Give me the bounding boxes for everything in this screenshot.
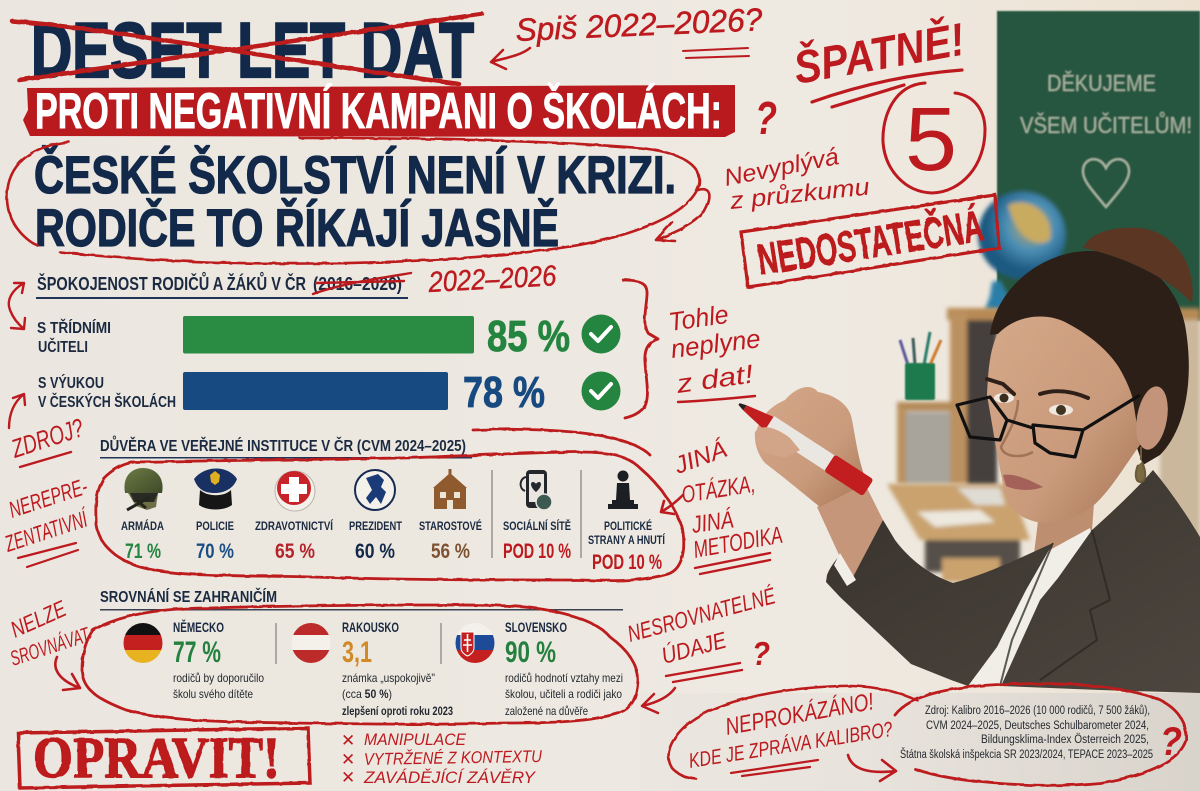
icon: phone [521, 470, 552, 510]
desk [887, 484, 1030, 582]
flag: Slovakia [456, 623, 494, 663]
column: mayors: STAROSTOVÉ [419, 518, 482, 533]
sources [900, 705, 1153, 761]
abroad loop [82, 605, 638, 724]
row: teaching: 78 % [463, 368, 545, 417]
title strike-through [12, 14, 482, 84]
Austria [342, 619, 453, 718]
note: Spiš 2022–2026? [491, 1, 763, 69]
row: teaching: V ČESKÝCH ŠKOLÁCH [38, 392, 176, 411]
correction strike [313, 273, 411, 294]
pencil cup [900, 332, 941, 400]
column: political parties: POD 10 % [592, 551, 662, 574]
Austria: RAKOUSKO [342, 619, 399, 635]
red banner: PROTI NEGATIVNÍ KAMPANI O ŠKOLÁCH: [35, 82, 722, 139]
bracket [623, 280, 658, 418]
correction: 2022–2026: 2022–2026 [427, 260, 558, 299]
brows [987, 379, 1088, 398]
icon: politician [608, 470, 638, 509]
stamp: nedostatečná: NEDOSTATEČNÁ [754, 200, 987, 285]
column: health care: 65 % [275, 540, 315, 563]
icon: police cap [194, 468, 237, 510]
note: nesrovnatelné údaje: ? [752, 635, 770, 672]
Germany [173, 618, 264, 701]
section 2: trust [100, 435, 666, 574]
note: neprokázáno, kde je zpráva Kalibro: NEPROKÁZÁNO! [723, 688, 876, 741]
ear [1132, 384, 1172, 452]
Germany: 77 % [173, 636, 221, 669]
flag: Germany [124, 623, 162, 663]
hair strands over forehead [992, 290, 1150, 405]
section heading: SROVNÁNÍ SE ZAHRANIČÍM [100, 587, 277, 606]
column: president: 60 % [355, 540, 395, 563]
note: jiná otázka, jiná metodika: OTÁZKA, [680, 471, 757, 509]
stamp: nedostatečná [741, 195, 999, 287]
note: tohle neplyne z dat: Tohle [667, 299, 730, 337]
title: Deset let dat: DESET LET DAT [31, 6, 474, 94]
chalkboard [997, 11, 1200, 321]
question mark at sources: ? [1160, 720, 1182, 764]
list of objections: ✕ [341, 768, 355, 787]
marker [734, 396, 874, 496]
chalkboard: DĚKUJEME [1047, 70, 1156, 96]
note: nesrovnatelné údaje [625, 582, 779, 713]
Austria: (cca 50 %) [342, 687, 392, 701]
note: nelze srovnávat: SROVNÁVAT [7, 623, 94, 671]
list of objections: MANIPULACE [364, 730, 467, 749]
note: jiná otázka, jiná metodika: METODIKA [691, 522, 785, 564]
source loop [895, 684, 1186, 785]
globe [978, 191, 1066, 310]
note: ŠPATNĚ!: ŠPATNĚ! [790, 13, 968, 94]
arm [817, 480, 883, 577]
note: Spiš 2022–2026?: Spiš 2022–2026? [515, 1, 763, 48]
list of objections: ZAVÁDĚJÍCÍ ZÁVĚRY [363, 768, 537, 787]
sources: Zdroj: Kalibro 2016–2026 (10 000 rodičů, 7 500 žáků), [925, 705, 1150, 717]
column: president: PREZIDENT [349, 519, 403, 533]
nose [1001, 400, 1033, 456]
red banner [23, 82, 735, 139]
note: nereprezentativní [1, 473, 93, 567]
Germany: školu svého dítěte [173, 687, 253, 701]
Austria: známka „uspokojivě" [342, 671, 435, 685]
Slovakia: rodičů hodnotí vztahy mezi [505, 671, 623, 685]
neck [1032, 490, 1095, 572]
note: jiná otázka, jiná metodika [670, 436, 785, 574]
icon: army helmet [124, 468, 163, 510]
classroom background [640, 11, 1200, 791]
section heading: ŠPOKOJENOST RODIČŮ A ŽÁKŮ V ČR [37, 272, 306, 294]
list of objections [341, 730, 543, 787]
icon: town hall [433, 469, 467, 509]
Austria: zlepšení oproti roku 2023 [342, 704, 453, 718]
note: tohle neplyne z dat [667, 299, 762, 402]
earring [1136, 447, 1145, 482]
note: tohle neplyne z dat: neplyne [669, 323, 762, 364]
note: neprokázáno, kde je zpráva Kalibro: KDE JE ZPRÁVA KALIBRO? [687, 718, 894, 773]
flag: Austria [292, 623, 330, 663]
column: army: ARMÁDA [121, 518, 164, 533]
Austria: 3,1 [342, 636, 372, 669]
section 3: abroad [100, 587, 623, 718]
column: political parties [588, 518, 666, 574]
note: nesrovnatelné údaje: NESROVNATELNÉ [625, 582, 779, 647]
note: nevyplývá z průzkumu: z průzkumu [728, 173, 871, 215]
row: class teachers [37, 312, 620, 361]
icon: president lion emblem [355, 470, 395, 510]
headline [34, 144, 676, 258]
list of objections: ✕ [341, 731, 355, 750]
note: nereprezentativní: NEREPRE- [6, 473, 91, 523]
note: nelze srovnávat [6, 595, 94, 690]
hair [990, 251, 1189, 465]
arrow to trust loop [661, 495, 683, 514]
separators [492, 470, 581, 558]
Slovakia: založené na důvěře [505, 704, 588, 718]
note: nevyplývá z průzkumu: Nevyplývá [722, 143, 841, 192]
thumb [755, 427, 800, 458]
sources: Bildungsklima-Index Österreich 2025, [981, 734, 1149, 746]
note: nereprezentativní: ZENTATIVNÍ [1, 505, 93, 557]
column: police [196, 519, 234, 563]
column: mayors: 56 % [431, 540, 470, 563]
row: class teachers: S TŘÍDNÍMI [37, 318, 111, 337]
question mark by banner: ? [755, 92, 777, 144]
Germany: rodičů by doporučilo [173, 671, 264, 685]
note: neprokázáno loop [669, 686, 918, 779]
Slovakia: školou, učiteli a rodiči jako [505, 687, 622, 701]
jacket [826, 470, 1200, 693]
glasses [957, 395, 1140, 457]
note: nesrovnatelné údaje: ÚDAJE [659, 626, 730, 669]
icon: health cross [275, 471, 315, 511]
note: zdroj? [7, 394, 88, 467]
note: nelze srovnávat: NELZE [6, 595, 70, 643]
Germany: NĚMECKO [173, 618, 224, 635]
bookshelf [897, 308, 1200, 540]
list of objections: ✕ [341, 750, 355, 769]
eyes [994, 393, 1073, 416]
column: political parties: POLITICKÉ [604, 518, 652, 533]
note: jiná otázka, jiná metodika: JINÁ [670, 436, 731, 480]
note: jiná otázka, jiná metodika: JINÁ [689, 506, 735, 539]
separators [276, 623, 441, 664]
column: health care [255, 518, 334, 563]
jacket lapels [1000, 530, 1110, 686]
section heading [36, 272, 408, 299]
column: army [121, 518, 164, 563]
section heading: (2016–2026) [313, 274, 402, 294]
column: president [349, 519, 403, 563]
note: neprokázáno, kde je zpráva Kalibro [687, 688, 896, 781]
column: mayors [419, 518, 482, 563]
row: class teachers: UČITELI [38, 337, 88, 356]
grade 5 circled: 5 [905, 90, 957, 190]
headline: ČESKÉ ŠKOLSTVÍ NENÍ V KRIZI. [34, 144, 676, 205]
Slovakia [505, 619, 623, 718]
column: social networks: SOCIÁLNÍ SÍTĚ [503, 518, 571, 533]
column: police: POLICIE [196, 519, 234, 533]
hair bun [1083, 228, 1193, 303]
Slovakia: SLOVENSKO [505, 619, 567, 635]
column: social networks: POD 10 % [503, 540, 571, 563]
lower paper panel [640, 693, 1200, 791]
note: nevyplývá z průzkumu [722, 143, 871, 215]
shirt [968, 528, 1092, 686]
column: health care: ZDRAVOTNICTVÍ [255, 518, 334, 533]
Slovakia: 90 % [505, 636, 556, 669]
row: teaching [38, 368, 620, 417]
grade 5 circled [883, 83, 985, 193]
note: tohle neplyne z dat: z dat! [673, 359, 755, 399]
row: class teachers: 85 % [487, 312, 570, 361]
mouth [1003, 475, 1043, 490]
teacher illustration [734, 228, 1200, 693]
stamp: opravit: OPRAVIT! [33, 725, 280, 790]
list of objections: VYTRŽENÉ Z KONTEXTU [364, 747, 543, 769]
cuff [834, 553, 856, 586]
headline circled in red [7, 138, 699, 264]
row: teaching: S VÝUKOU [38, 373, 104, 392]
column: army: 71 % [125, 540, 161, 563]
column: social networks [503, 518, 571, 563]
sources: CVM 2024–2025, Deutsches Schulbarometer 2024, [926, 720, 1149, 732]
arrow to headline [656, 189, 709, 241]
note: zdroj?: ZDROJ? [7, 412, 88, 464]
section heading: DŮVĚRA VE VEŘEJNÉ INSTITUCE V ČR (CVM 2024–2025) [100, 435, 466, 455]
left curved double arrow [9, 283, 25, 329]
hand [755, 387, 867, 507]
section 1: satisfaction [36, 260, 620, 417]
column: political parties: STRANY A HNUTÍ [588, 532, 666, 547]
face [987, 316, 1140, 523]
column: police: 70 % [196, 540, 234, 563]
trust loop [96, 429, 684, 581]
headline: RODIČE TO ŘÍKAJÍ JASNĚ [35, 197, 559, 258]
